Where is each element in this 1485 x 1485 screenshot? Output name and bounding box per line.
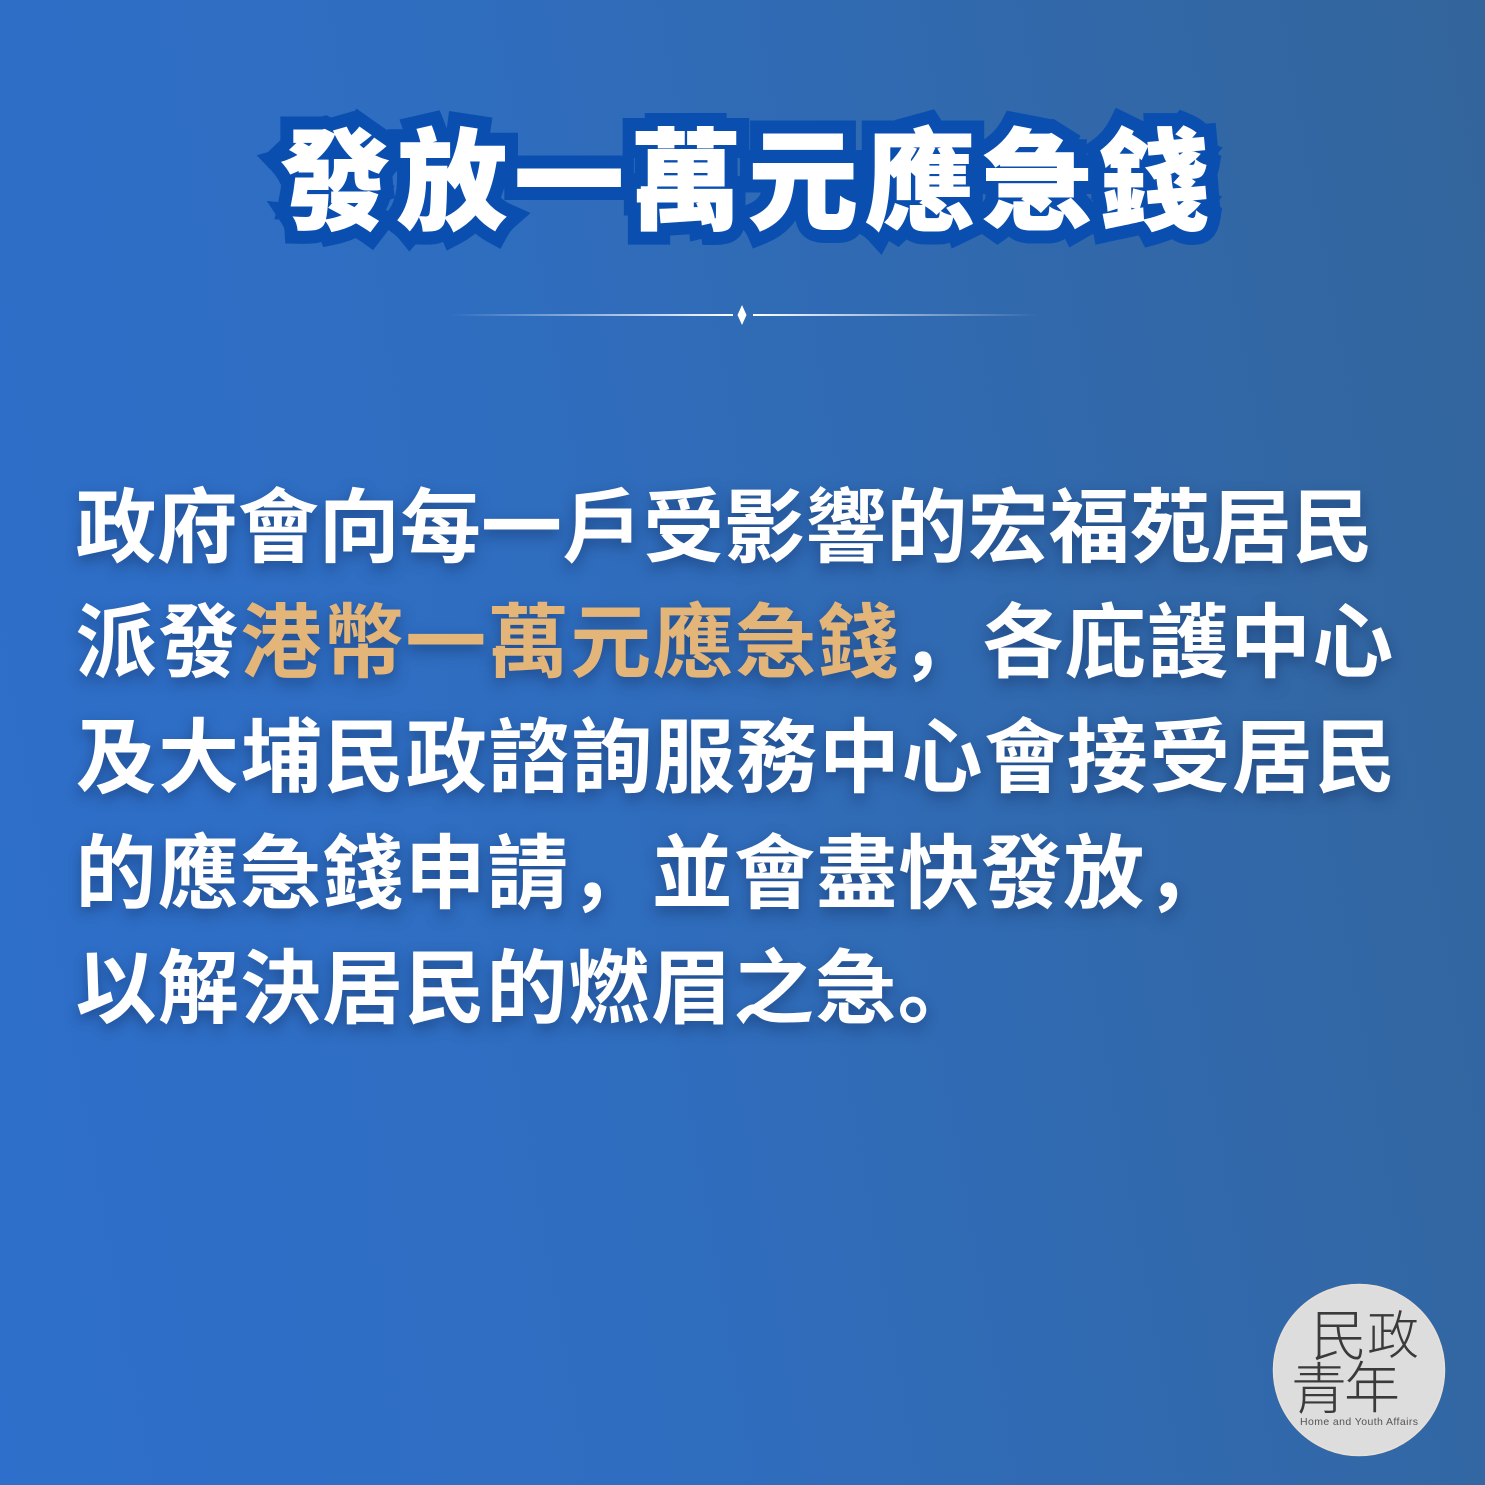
title: 發放一萬元應急錢 <box>280 93 1216 253</box>
body text: 以解決居民的燃眉之急。 <box>76 924 980 1041</box>
logo badge: 青 <box>1291 1345 1347 1426</box>
divider with diamond <box>462 305 1026 325</box>
body text: 政府會向每一戶受影響的宏福苑居民 <box>76 463 1373 580</box>
body text: 的應急錢申請，並會盡快發放， <box>76 809 1228 926</box>
logo badge: 年 <box>1344 1344 1400 1425</box>
logo badge: 政 <box>1367 1294 1419 1369</box>
logo badge <box>1272 1284 1446 1456</box>
body text <box>72 463 1397 1041</box>
body text: 及大埔民政諮詢服務中心會接受居民 <box>76 693 1397 810</box>
logo badge: 民 <box>1311 1292 1367 1373</box>
logo badge: Home and Youth Affairs <box>1300 1416 1418 1428</box>
body text: 派發港幣一萬元應急錢，各庇護中心 <box>76 578 1395 695</box>
title: 發放一萬元應急錢 <box>280 93 1216 253</box>
